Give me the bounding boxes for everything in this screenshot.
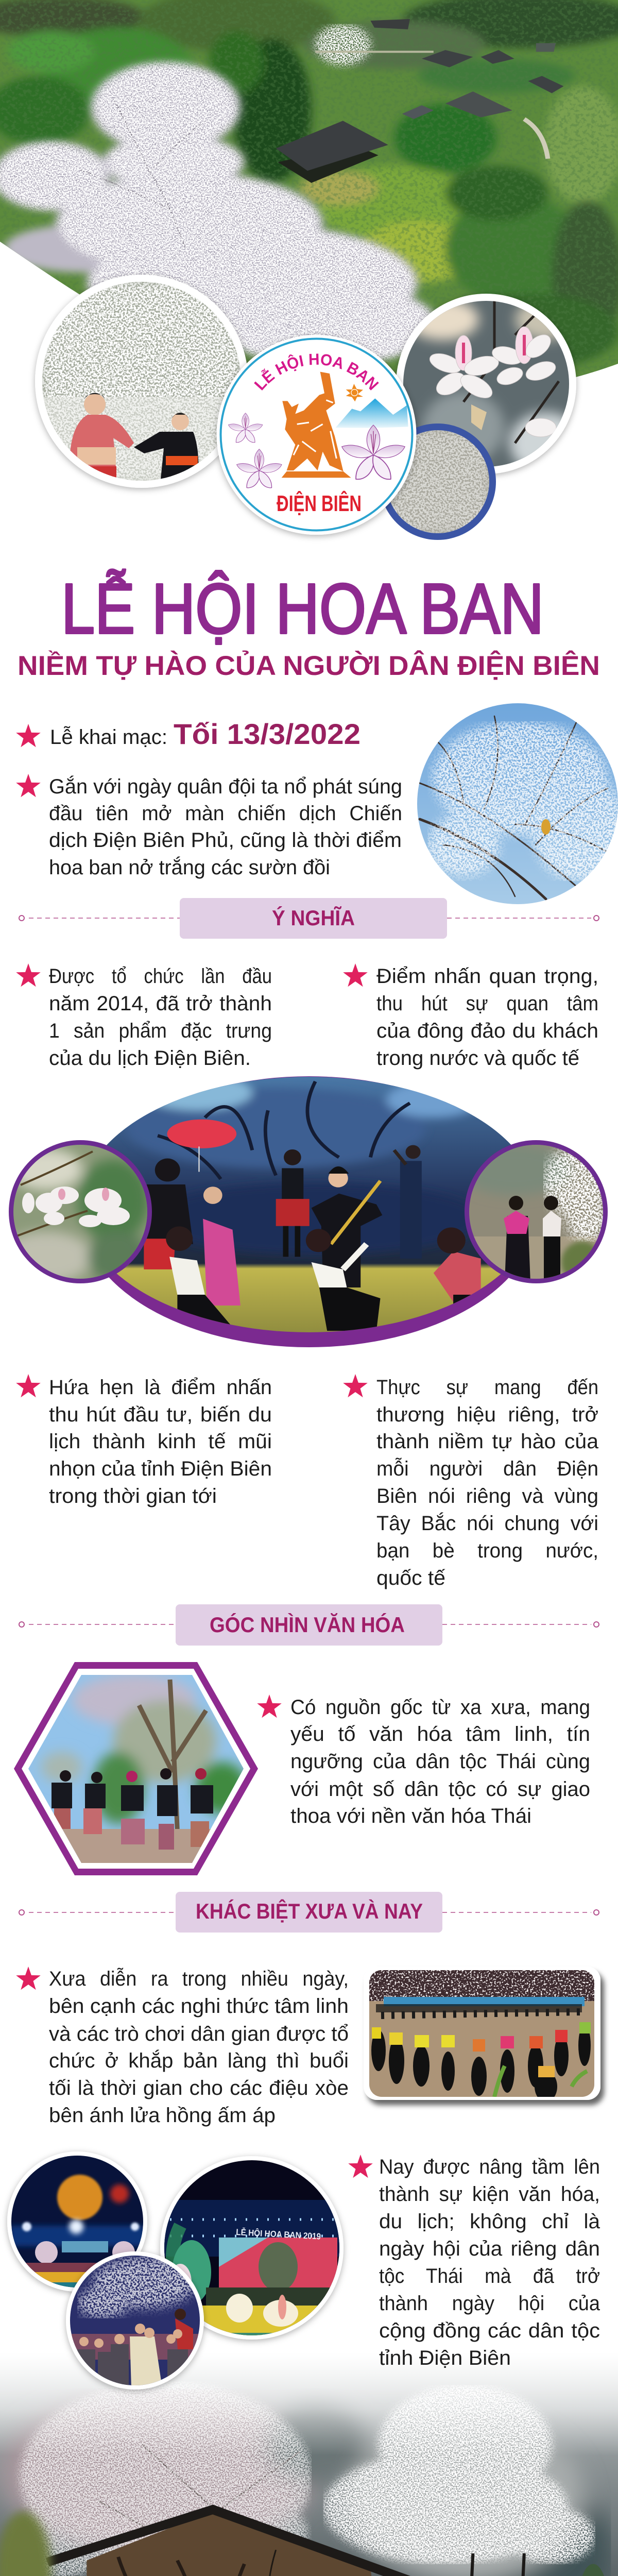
meaning item 1: 1 sản phẩm đặc trưng (49, 1020, 272, 1042)
past paragraph: bên ánh lửa hồng ấm áp (49, 2104, 276, 2127)
round photo: blossom tree against blue sky (417, 703, 618, 904)
meaning item 4: quốc tế (376, 1567, 445, 1589)
meaning item 4: Thực sự mang đến (376, 1376, 598, 1399)
meaning item 4 (343, 1374, 599, 1589)
meaning item 4: mỗi người dân Điện (376, 1457, 598, 1480)
oval photo panel: folk performance (0, 1074, 610, 1347)
logo place name: ĐIỆN BIÊN (277, 490, 362, 516)
section heading: Ý nghĩa: Ý NGHĨA (272, 906, 355, 930)
meaning item 3: thu hút đầu tư, biến du (49, 1403, 272, 1426)
meaning item 1: của du lịch Điện Biên. (49, 1047, 251, 1070)
festival logo badge (213, 333, 420, 540)
past paragraph (16, 1967, 349, 2127)
present paragraph: ngày hội của riêng dân (379, 2238, 600, 2260)
photo circle: hoa ban flowers close-up (396, 294, 582, 474)
present paragraph: thành ngày hội của (379, 2292, 600, 2315)
culture paragraph: Có nguồn gốc từ xa xưa, mang (290, 1696, 590, 1719)
star bullet (16, 774, 41, 797)
section heading: Khác biệt xưa và nay: KHÁC BIỆT XƯA VÀ NAY (196, 1899, 423, 1923)
hexagon photo: women in Thai dress under a tree (14, 1662, 258, 1875)
meaning item 4: bạn bè trong nước, (376, 1539, 598, 1562)
meaning item 3: Hứa hẹn là điểm nhấn (49, 1376, 272, 1399)
bottom landscape: house, blossom trees and children (0, 2352, 618, 2576)
culture paragraph (257, 1694, 590, 1827)
small photo circle: fireworks at opening night (7, 2151, 147, 2293)
subtitle: NIỀM TỰ HÀO CỦA NGƯỜI DÂN ĐIỆN BIÊN (18, 650, 600, 681)
present paragraph: du lịch; không chỉ là (379, 2210, 600, 2233)
large photo circle: festival stage 2019 (160, 2156, 345, 2342)
present paragraph (348, 2155, 600, 2369)
section heading: Khác biệt xưa và nay (19, 1892, 599, 1933)
meaning item 3: lịch thành kinh tế mũi (49, 1430, 272, 1453)
meaning item 3 (16, 1374, 272, 1507)
section heading: Góc nhìn văn hóa (19, 1604, 599, 1646)
meaning item 1: năm 2014, đã trở thành (49, 992, 272, 1015)
culture paragraph: với một số dân tộc có sự giao (290, 1778, 590, 1801)
opening date: Tối 13/3/2022 (174, 718, 360, 750)
paragraph text: đầu tiên mở màn chiến dịch Chiến (49, 802, 402, 825)
meaning item 2: trong nước và quốc tế (376, 1047, 579, 1070)
meaning item 4: Biên nói riêng và vùng (376, 1485, 598, 1507)
paragraph text: Gắn với ngày quân đội ta nổ phát súng (49, 775, 402, 798)
meaning item 2 (343, 963, 598, 1070)
intro paragraph (16, 774, 402, 879)
paragraph text (49, 775, 402, 879)
present paragraph: tộc Thái mà đã trở (379, 2265, 600, 2287)
meaning item 4: thành niềm tự hào của (376, 1430, 599, 1453)
past paragraph: tối là thời gian cho các điệu xòe (49, 2077, 349, 2099)
present paragraph: tỉnh Điện Biên (379, 2347, 511, 2369)
star bullet (16, 724, 41, 747)
meaning item 1: Được tổ chức lần đầu (49, 965, 272, 988)
past paragraph: bên cạnh các nghi thức tâm linh (49, 1995, 349, 2018)
meaning item 4: Tây Bắc nói chung với (376, 1512, 598, 1535)
left inset photo: blossom branch (0, 1140, 154, 1285)
past paragraph: Xưa diễn ra trong nhiều ngày, (49, 1967, 349, 1990)
meaning item 3: trong thời gian tới (49, 1485, 217, 1507)
meaning item 1 (16, 963, 272, 1070)
section heading: Ý nghĩa (19, 898, 599, 939)
logo title: LỄ HỘI HOA BAN (254, 353, 379, 391)
paragraph text: dịch Điện Biên Phủ, cũng là thời điểm (49, 829, 402, 852)
culture paragraph: yếu tố văn hóa tâm linh, tín (290, 1723, 590, 1745)
opening label: Lễ khai mạc: (50, 725, 167, 749)
culture paragraph: ngưỡng của dân tộc Thái cùng (290, 1750, 590, 1773)
present paragraph: Nay được nâng tầm lên (379, 2156, 600, 2178)
small photo circle: fashion show on stage (66, 2251, 204, 2389)
present paragraph: thành sự kiện văn hóa, (379, 2183, 600, 2206)
meaning item 4: thương hiệu riêng, trở (376, 1403, 598, 1426)
photo circle: two women among blossoms (35, 275, 248, 488)
hero photo: village and blossoming trees (0, 0, 618, 407)
past paragraph: và các trò chơi dân gian được tổ (49, 2023, 349, 2045)
meaning item 2: thu hút sự quan tâm (376, 992, 598, 1015)
opening date line (16, 718, 360, 750)
stage banner text: LỄ HỘI HOA BAN 2019 (236, 2227, 321, 2242)
meaning item 3: nhọn của tỉnh Điện Biên (49, 1458, 272, 1480)
culture paragraph: thoa với nền văn hóa Thái (290, 1805, 531, 1827)
white fade over top of landscape (0, 2352, 618, 2455)
present paragraph: cộng đồng các dân tộc (379, 2319, 600, 2342)
title: LỄ HỘI HOA BAN (61, 569, 544, 649)
meaning item 2: Điểm nhấn quan trọng, (376, 965, 598, 988)
logo artwork: statue, sun, mountains, flowers (228, 372, 408, 488)
right inset photo: two women on a hillside (458, 1140, 610, 1288)
rounded photo: xoe circle dance (364, 1967, 600, 2102)
past paragraph: chức ở khắp bản làng thì buổi (49, 2049, 349, 2072)
section heading: Góc nhìn văn hóa: GÓC NHÌN VĂN HÓA (210, 1612, 405, 1637)
paragraph text: hoa ban nở trắng các sườn đồi (49, 856, 330, 879)
small photo circle: hillside of blossoms (380, 423, 496, 540)
meaning item 2: của đông đảo du khách (376, 1020, 598, 1042)
